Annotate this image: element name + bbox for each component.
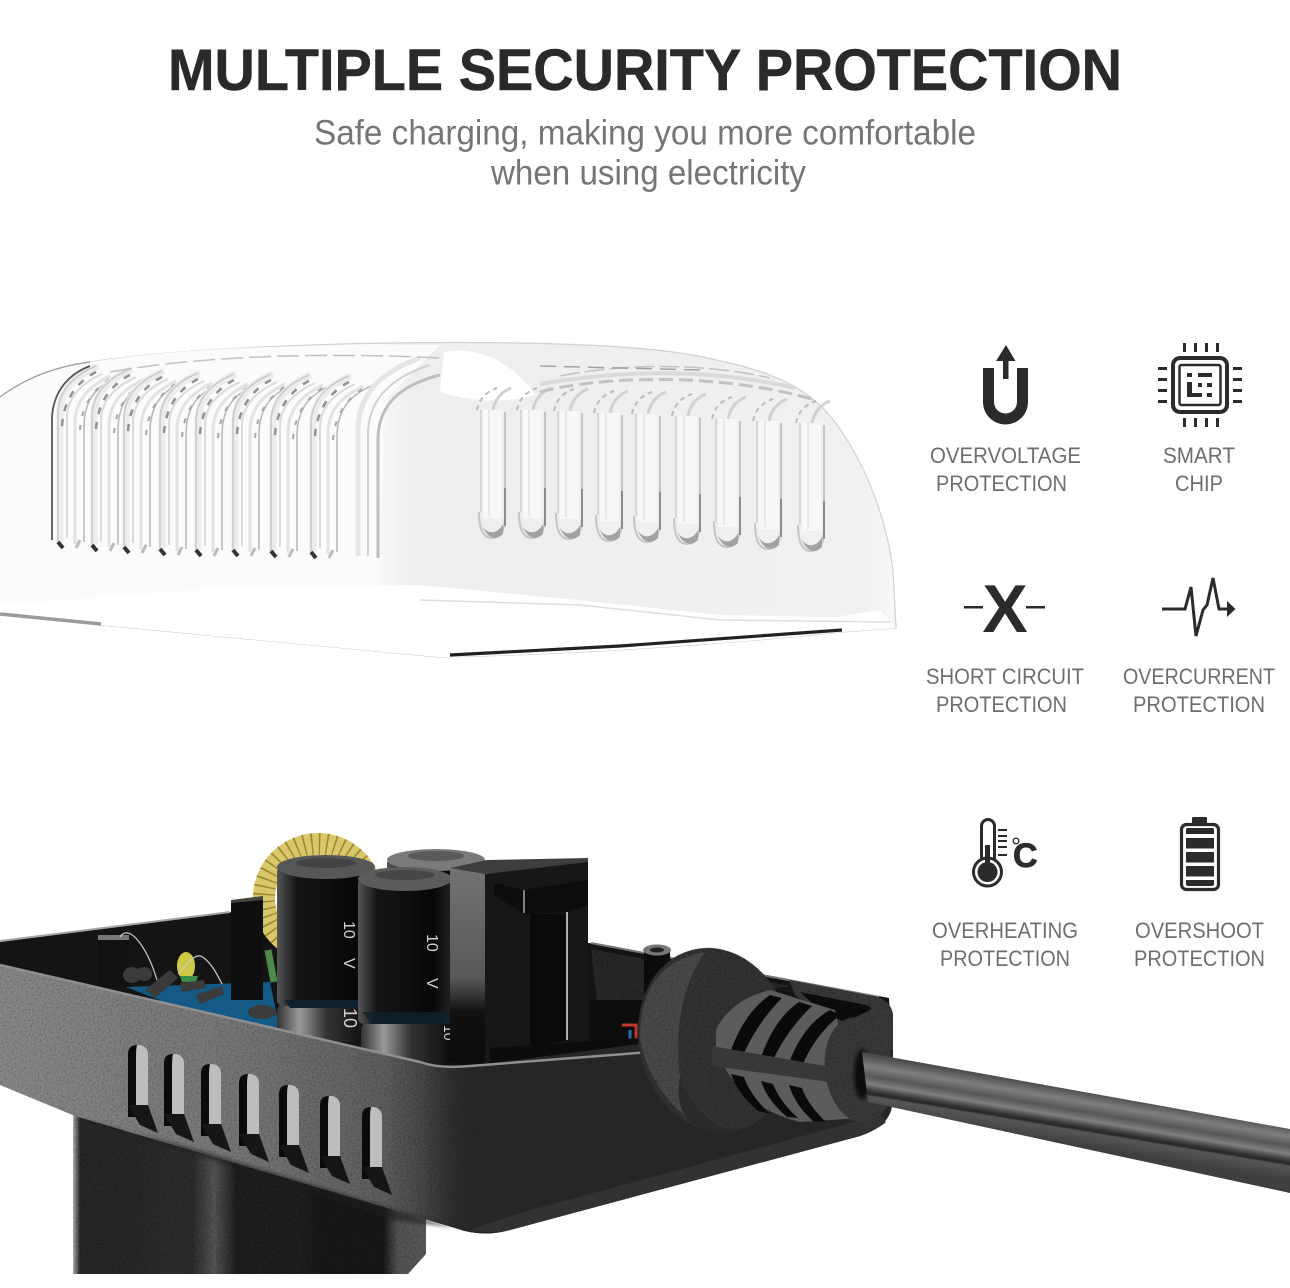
capacitor markings: 10 [340,921,357,939]
case rim highlight [0,965,650,1067]
capacitor markings: V [423,978,440,989]
smart chip feature [1158,343,1242,496]
small black component [231,896,263,1000]
grommet ribbed body [716,990,860,1122]
back capacitor [387,849,485,922]
label: OVERVOLTAGE [930,443,1081,468]
label [932,918,1078,971]
feature icons and labels [926,343,1275,971]
left capacitor [277,855,375,1042]
label: CHIP [1175,471,1223,496]
case shell front [0,965,893,1234]
front capacitor [358,867,457,1070]
label [930,443,1081,496]
left vent ribs [52,358,440,558]
capacitor markings: 10 [340,1008,360,1028]
overvoltage feature [930,345,1081,496]
label: PROTECTION [1134,946,1265,971]
subtitle [314,114,976,192]
icon: chip [1158,343,1242,427]
case interior [0,912,893,1070]
vent slots [128,1045,392,1195]
short circuit feature [926,571,1084,717]
label [1163,443,1235,496]
icon: magnet with arrow [983,345,1028,424]
label: PROTECTION [940,946,1070,971]
case lower crease [470,1115,886,1232]
icon: thermometer with degrees [974,820,1038,886]
subtitle: Safe charging, making you more comfortable [314,114,976,152]
transparent adapter cover [0,343,896,657]
small top capacitor [643,944,671,1000]
cover top dome highlight [440,351,536,401]
grommet band [712,1046,859,1086]
overheating feature [932,820,1078,971]
capacitor markings [423,934,457,1041]
wall plug body [73,1100,426,1274]
icon: current pulse [1162,578,1236,636]
cover lower inner floor [0,585,896,657]
cover body [0,343,896,657]
label [1123,664,1275,717]
label: PROTECTION [936,692,1067,717]
lower shadow [75,1117,455,1228]
title: MULTIPLE SECURITY PROTECTION [168,38,1122,103]
black transformer block [450,858,640,1070]
icon: battery [1182,817,1218,890]
cover left outline [0,362,90,397]
upper reflections [110,355,815,400]
label: PROTECTION [936,471,1067,496]
grommet end disc [818,1013,900,1127]
case right dark overlay [390,1044,893,1234]
label: OVERHEATING [932,918,1078,943]
label [926,664,1084,717]
capacitor markings: 10 [441,1025,457,1041]
grommet slits [731,995,840,1122]
grommet flange [619,931,811,1149]
icon: short circuit cross [964,571,1045,647]
label: SHORT CIRCUIT [926,664,1084,689]
label [1134,918,1265,971]
right vent ribs [477,388,830,551]
subtitle: when using electricity [490,154,806,192]
label: OVERCURRENT [1123,664,1275,689]
circuit board [98,933,650,1060]
label: PROTECTION [1133,692,1265,717]
power cord [862,1052,1290,1193]
opened black power adapter [0,844,1290,1274]
overshoot feature [1134,817,1265,971]
label: OVERSHOOT [1135,918,1264,943]
capacitor markings [340,921,360,1028]
cover bottom edges [0,600,890,655]
cable grommet [619,931,900,1149]
capacitor markings: V [340,958,357,969]
gold toroid coil [264,844,372,982]
icon: thermometer with degrees: C [1013,837,1038,875]
overcurrent feature [1123,578,1275,717]
capacitor markings: 10 [423,934,440,952]
left face of cover [0,345,440,610]
label: SMART [1163,443,1235,468]
case right rim behind grommet [789,980,893,1050]
icon: short circuit cross: X [982,571,1028,647]
